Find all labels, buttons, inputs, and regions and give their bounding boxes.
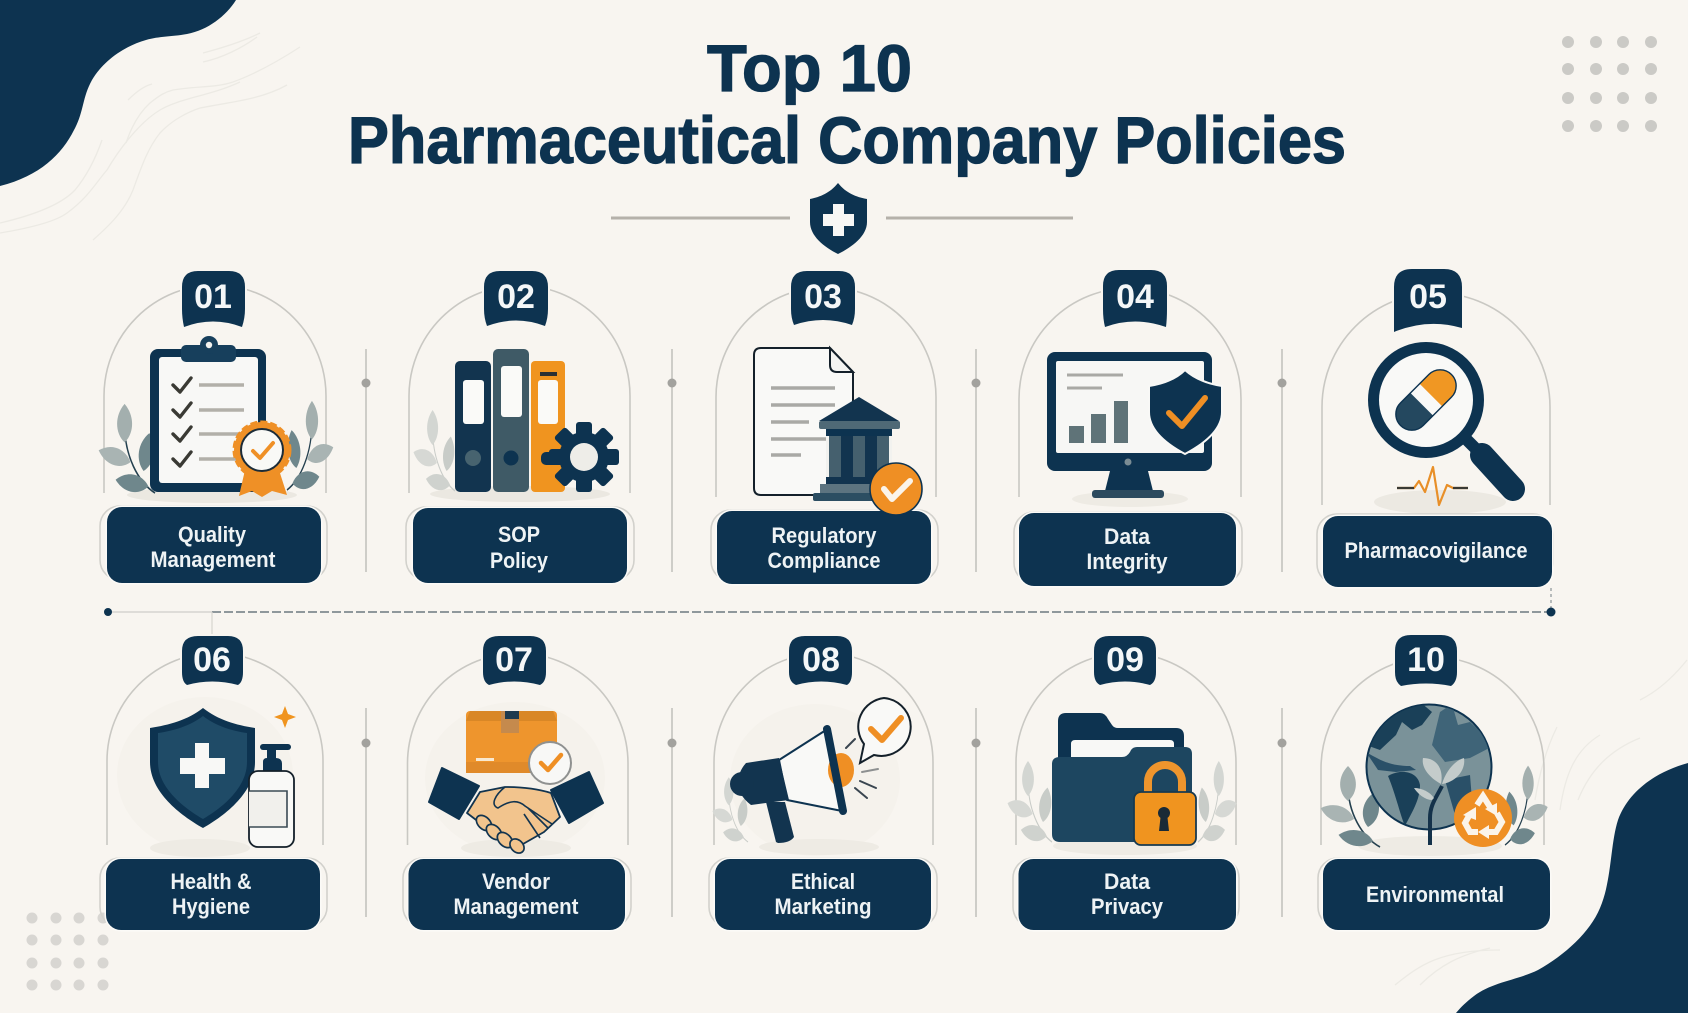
label: Health & Hygiene: Health & (170, 869, 252, 894)
label: Data Integrity: Integrity (1086, 549, 1168, 574)
badge 01: 01 (194, 278, 232, 316)
label: Pharmacovigilance (1317, 514, 1553, 587)
label: Regulatory Compliance: Compliance (768, 548, 880, 573)
label: Vendor Management: Management (454, 894, 579, 919)
icon: magnifier, capsule and pulse (1374, 348, 1513, 514)
badge 02 (484, 271, 548, 326)
card 04: Data Integrity (1014, 270, 1242, 586)
card 06: Health & Hygiene (100, 636, 327, 930)
label: Quality Management: Quality (178, 522, 247, 547)
label: Vendor Management (403, 858, 631, 930)
badge 10 (1395, 635, 1457, 686)
card 01: Quality Management (96, 271, 335, 583)
label: Data Integrity (1014, 512, 1242, 586)
decorative blob: bottom right (1395, 660, 1688, 1013)
badge 05 (1394, 269, 1462, 332)
decorative blob: top left (0, 0, 300, 240)
label: Vendor Management: Vendor (482, 869, 550, 894)
title (348, 31, 1346, 177)
card 09: Data Privacy (1006, 636, 1239, 930)
title: Top 10 (707, 31, 912, 105)
icon: parcel and handshake (425, 702, 605, 857)
icon: megaphone with speech bubble (711, 698, 911, 856)
badge 03: 03 (804, 278, 842, 316)
badge 07 (483, 636, 546, 685)
label: Quality Management (100, 506, 327, 583)
label: Regulatory Compliance (711, 510, 938, 584)
badge 09 (1094, 636, 1156, 685)
label: Data Privacy: Data (1104, 869, 1151, 894)
badge 08 (789, 636, 852, 685)
label: Ethical Marketing: Ethical (791, 869, 855, 894)
icon: monitor with shield (1047, 352, 1222, 507)
badge 09: 09 (1106, 641, 1144, 679)
badge 01 (182, 271, 245, 327)
label: Ethical Marketing (709, 858, 937, 930)
label: SOP Policy (406, 507, 634, 583)
label: Ethical Marketing: Marketing (774, 894, 872, 919)
icon: binders and gear (412, 349, 619, 502)
card 02: SOP Policy (406, 271, 634, 583)
card 08: Ethical Marketing (709, 636, 937, 930)
label: Health & Hygiene (100, 858, 327, 930)
label: SOP Policy: Policy (490, 548, 549, 573)
badge 04 (1103, 270, 1167, 327)
dot grid: top right (1562, 36, 1657, 132)
badge 04: 04 (1116, 278, 1154, 316)
title divider with shield icon (611, 183, 1073, 254)
label: Data Privacy (1013, 858, 1239, 930)
badge 06 (182, 636, 243, 685)
label: Regulatory Compliance: Regulatory (772, 523, 877, 548)
label: Data Privacy: Privacy (1091, 894, 1164, 919)
badge 02: 02 (497, 278, 535, 316)
icon: shield, soap bottle and sparkle (117, 697, 296, 857)
label: Environmental: Environmental (1366, 882, 1504, 907)
label: Pharmacovigilance: Pharmacovigilance (1344, 538, 1528, 563)
badge 03 (791, 271, 855, 325)
label: Quality Management: Management (150, 547, 276, 572)
label: Health & Hygiene: Hygiene (172, 894, 250, 919)
badge 08: 08 (802, 641, 840, 679)
card 05: Pharmacovigilance (1317, 269, 1553, 587)
label: SOP Policy: SOP (498, 522, 540, 547)
badge 10: 10 (1407, 641, 1445, 679)
column dividers (362, 349, 1286, 917)
label: Environmental (1318, 858, 1550, 930)
icon: clipboard with rosette (96, 336, 335, 503)
label: Data Integrity: Data (1104, 524, 1151, 549)
card 03: Regulatory Compliance (711, 271, 938, 584)
icon: folder with padlock (1006, 713, 1238, 855)
icon: document, bank and check (754, 348, 922, 515)
card 07: Vendor Management (403, 636, 631, 930)
badge 05: 05 (1409, 278, 1447, 316)
title: Pharmaceutical Company Policies (348, 103, 1346, 177)
badge 06: 06 (193, 641, 231, 679)
card 10: Environmental (1318, 635, 1550, 930)
row divider line (104, 588, 1556, 640)
icon: globe, seedling and recycle badge (1318, 702, 1549, 856)
dot grid: bottom left (26, 912, 108, 990)
badge 07: 07 (495, 641, 533, 679)
